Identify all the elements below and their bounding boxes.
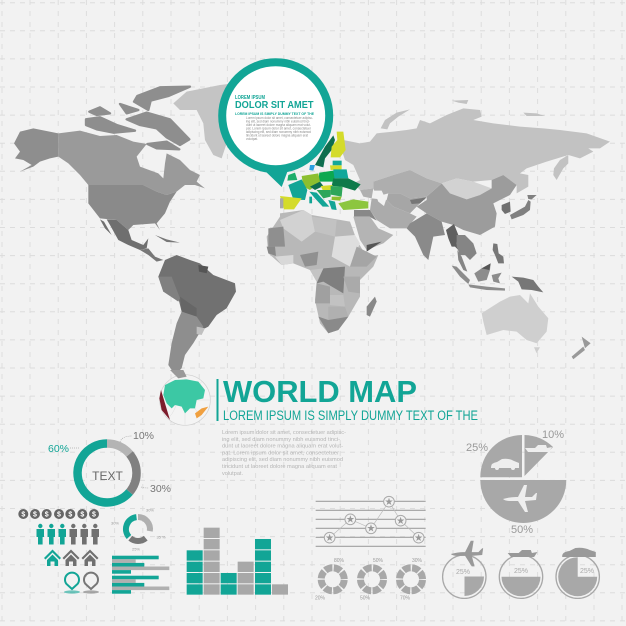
Sardinia <box>309 197 312 203</box>
Iran and Pakistan <box>370 198 417 228</box>
horizontal bar chart <box>112 556 169 594</box>
Belarus <box>333 169 348 178</box>
Southeast Asia <box>457 235 477 272</box>
Bulgaria <box>332 197 342 201</box>
small gauge: car <box>556 548 599 598</box>
UK <box>287 173 297 181</box>
icons: dollar coins: $ <box>21 512 25 518</box>
small donut chart: 35 % <box>156 534 166 540</box>
icon: car <box>491 459 519 470</box>
stacked cell bar chart <box>187 528 288 595</box>
Guyana <box>198 265 208 273</box>
Spain <box>280 196 302 209</box>
Czechia and Austria <box>310 182 323 190</box>
body text <box>222 430 346 477</box>
Borneo <box>474 263 491 282</box>
Caspian Sea <box>374 191 386 206</box>
small gauge: boat <box>499 550 543 598</box>
small donut chart: 25% <box>132 546 140 552</box>
map: Africa, Asia and Oceania <box>267 100 610 359</box>
segmented ring charts: 50% <box>373 558 384 564</box>
Poland <box>318 171 335 182</box>
callout bubble: ing elit, sed diam nonummy nibh euismod tinci- <box>246 120 310 124</box>
Arabia <box>353 217 393 250</box>
Mexico <box>100 219 148 250</box>
callout bubble: adipiscing elit, sed diam nonummy nibh euismod <box>246 130 311 134</box>
USA <box>88 185 177 230</box>
star line chart: ★ <box>346 515 355 526</box>
donut chart: TEXT: 60% <box>48 443 69 455</box>
callout bubble: DOLOR SIT AMET <box>235 99 314 111</box>
small donut chart: 30% <box>111 520 119 526</box>
title: WORLD MAP <box>223 374 417 409</box>
body text: adipiscing elit, sed diam nonummy nibh euismod <box>222 457 343 463</box>
icons: dollar coins: $ <box>92 512 96 518</box>
India <box>407 213 445 260</box>
transport pie chart: 50% <box>511 524 533 536</box>
donut chart: TEXT <box>48 430 171 502</box>
Central America and Caribbean <box>140 235 180 262</box>
donut chart: TEXT: 30% <box>150 483 171 495</box>
Portugal <box>280 198 283 208</box>
callout bubble: Lorem ipsum dolor sit amet, consectetuer adipisc- <box>246 116 313 120</box>
Germany <box>302 173 320 190</box>
Iraq and Syria <box>354 210 377 221</box>
icons: people <box>36 524 99 544</box>
small gauge: plane: 25% <box>456 569 470 576</box>
map: highlighted Europe <box>280 132 368 210</box>
star line chart: ★ <box>385 497 394 508</box>
callout bubble: volutpat. <box>246 137 258 141</box>
star line chart: ★ <box>325 533 334 544</box>
callout bubble: tincidunt ut laoreet dolore magna aliquam erat <box>246 134 308 138</box>
small donut chart: 30% <box>146 508 154 512</box>
Argentina and Chile <box>168 312 203 375</box>
icon: plane <box>503 485 537 512</box>
Indonesia <box>452 266 505 291</box>
globe icon <box>159 370 210 425</box>
Mongolia <box>442 178 492 199</box>
segmented ring charts <box>315 558 423 602</box>
New Zealand <box>572 337 591 359</box>
Alaska <box>14 128 58 172</box>
callout bubble: LOREM IPSUM IS SIMPLY DUMMY TEXT OF THE <box>235 111 314 116</box>
star line chart: ★ <box>414 533 423 544</box>
Korea and Japan <box>502 202 511 214</box>
body text: tincidunt ut laoreet dolore magna aliquam erat <box>222 464 337 470</box>
icons: dollar coins: $ <box>45 512 49 518</box>
body text: volutpat. <box>222 471 243 477</box>
body text: pat. Lorem ipsum dolor sit amet, consectetuer <box>222 450 339 456</box>
Caucasus <box>360 188 373 198</box>
Hungary <box>321 185 333 190</box>
Peru and neighbours <box>158 277 180 302</box>
small gauge: plane <box>443 541 486 598</box>
donut chart: TEXT: TEXT <box>92 469 124 483</box>
Finland <box>331 132 346 157</box>
France <box>288 179 307 200</box>
Russia <box>342 100 610 193</box>
Bolivia <box>180 297 197 317</box>
star line chart: ★ <box>367 524 376 535</box>
Norway and Sweden <box>315 135 335 167</box>
icons: map pins <box>64 573 99 594</box>
segmented ring charts: 20% <box>315 596 326 602</box>
icons: dollar coins <box>18 509 99 519</box>
callout bubble: LOREM IPSUM <box>235 95 265 101</box>
transport pie chart: 25% <box>466 442 488 454</box>
icons: dollar coins: $ <box>33 512 37 518</box>
body text: Lorem ipsum dolor sit amet, consectetuer adipisc- <box>222 430 346 436</box>
Central Asia <box>387 193 427 213</box>
Latvia and Lithuania <box>330 165 342 170</box>
icons: dollar coins: $ <box>80 512 84 518</box>
Africa countries <box>280 210 315 242</box>
icon: boat <box>525 445 552 452</box>
segmented ring charts: 70% <box>400 596 411 602</box>
Philippines <box>493 243 504 263</box>
Greenland <box>173 83 233 158</box>
donut chart: TEXT: 10% <box>133 430 154 442</box>
transport pie chart <box>466 429 566 536</box>
title rule <box>216 379 218 421</box>
Italy <box>309 192 329 207</box>
Greece <box>328 200 337 210</box>
Australia <box>482 293 548 343</box>
Arctic islands <box>86 87 190 149</box>
Uruguay <box>197 327 205 335</box>
body text: ing elit, sed diam nonummy nibh euismod tinci- <box>222 437 340 443</box>
map: Americas <box>14 83 236 375</box>
Kazakhstan <box>373 170 442 198</box>
segmented ring charts: 80% <box>334 558 345 564</box>
small gauge: boat: 25% <box>514 568 528 575</box>
star line chart <box>316 496 426 546</box>
small gauge: car: 25% <box>580 568 594 575</box>
Romania <box>331 186 343 197</box>
callout bubble: dunt ut laoreet dolore magna aliquam erat volut- <box>246 123 311 127</box>
Estonia <box>333 161 342 165</box>
South America north <box>158 255 236 330</box>
Turkey <box>338 199 368 210</box>
body text: dunt ut laoreet dolore magna aliquam erat volut- <box>222 444 343 450</box>
segmented ring charts: 30% <box>412 558 423 564</box>
transport pie chart: 10% <box>542 429 564 441</box>
subtitle: LOREM IPSUM IS SIMPLY DUMMY TEXT OF THE <box>223 408 478 423</box>
callout bubble <box>218 58 333 187</box>
small donut chart <box>111 508 166 552</box>
China <box>417 175 517 235</box>
Canada <box>58 131 205 195</box>
icons: houses <box>44 550 98 566</box>
Africa base <box>267 210 378 333</box>
Papua New Guinea <box>512 277 543 292</box>
icons: dollar coins: $ <box>57 512 61 518</box>
icons: dollar coins: $ <box>68 512 72 518</box>
Ukraine <box>332 178 361 191</box>
callout bubble: pat. Lorem ipsum dolor sit amet, consectetuer <box>246 126 312 130</box>
segmented ring charts: 50% <box>360 596 371 602</box>
Myanmar <box>446 224 458 250</box>
star line chart: ★ <box>396 516 405 527</box>
Madagascar <box>367 297 377 317</box>
Denmark <box>309 165 315 171</box>
Western Balkans <box>317 190 331 198</box>
